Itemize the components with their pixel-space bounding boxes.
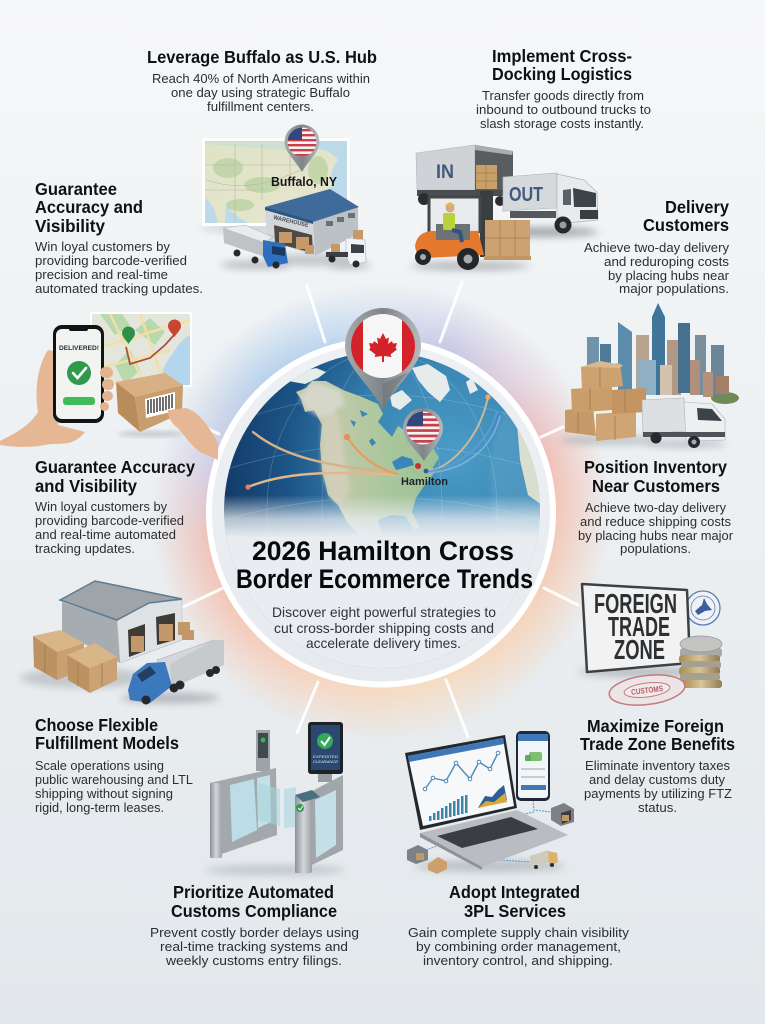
heading: Maximize Foreign xyxy=(587,716,724,736)
description: public warehousing and LTL xyxy=(35,772,193,787)
description: inbound to outbound trucks to xyxy=(476,102,651,117)
phone xyxy=(53,325,104,423)
heading: Prioritize Automated xyxy=(173,882,334,902)
icon: Canada flag pin xyxy=(345,308,421,410)
heading: Leverage Buffalo as U.S. Hub xyxy=(147,47,377,67)
circle base xyxy=(209,340,553,684)
heading: Visibility xyxy=(35,216,105,236)
heading: Choose Flexible xyxy=(35,715,158,735)
illustration: cross-dock trucks and forklift: OUT xyxy=(509,184,543,206)
cardboard boxes xyxy=(560,435,660,445)
description xyxy=(35,499,184,556)
description: and reduce shipping costs xyxy=(580,514,731,529)
heading: Guarantee Accuracy xyxy=(35,457,195,477)
phone xyxy=(516,731,550,801)
illustration: customs gates: CLEARANCE xyxy=(313,759,338,764)
coin stack xyxy=(679,636,722,688)
illustration: cross-dock trucks and forklift xyxy=(410,145,600,270)
description: rigid, long-term leases. xyxy=(35,800,164,815)
cardboard boxes xyxy=(33,630,117,693)
heading xyxy=(643,197,729,235)
description: Transfer goods directly from xyxy=(482,88,644,103)
small warehouse right xyxy=(551,803,574,826)
warehouse building xyxy=(62,602,120,663)
white delivery truck xyxy=(643,441,727,447)
description: Scale operations using xyxy=(35,758,164,773)
description xyxy=(584,240,730,296)
description xyxy=(476,88,651,131)
heading xyxy=(35,715,179,753)
description: providing barcode-verified xyxy=(35,253,187,268)
heading: Near Customers xyxy=(592,476,720,496)
description: automated tracking updates. xyxy=(35,281,203,296)
second hand xyxy=(168,408,218,460)
description: populations. xyxy=(620,541,691,556)
description: Eliminate inventory taxes xyxy=(585,758,730,773)
network lines xyxy=(420,800,551,862)
title xyxy=(236,536,533,594)
illustration: Buffalo map and warehouse: WAREHOUSE xyxy=(273,215,309,229)
description: Reach 40% of North Americans within xyxy=(152,71,370,86)
description: Win loyal customers by xyxy=(35,239,171,254)
description xyxy=(35,758,193,815)
area chart xyxy=(478,785,507,808)
description xyxy=(150,925,359,968)
grid xyxy=(224,358,540,525)
check screen xyxy=(318,770,332,782)
illustration: cross-dock trucks and forklift: IN xyxy=(436,162,454,183)
description: tracking updates. xyxy=(35,541,135,556)
bar chart xyxy=(429,795,468,821)
forklift driver xyxy=(446,204,454,212)
laptop screen xyxy=(405,735,517,830)
heading: Fulfillment Models xyxy=(35,733,179,753)
description: Win loyal customers by xyxy=(35,499,168,514)
label: Buffalo, NY: Buffalo, NY xyxy=(271,175,338,189)
illustration: FTZ sign, coins and stamps xyxy=(578,584,722,709)
panel: Guarantee Accuracy and Visibility (upper) xyxy=(0,179,218,460)
title: Border Ecommerce Trends xyxy=(236,564,533,594)
panel: Prioritize Automated Customs Compliance xyxy=(150,722,359,968)
description: fulfillment centers. xyxy=(207,99,314,114)
illustration: FTZ sign, coins and stamps: TRADE xyxy=(608,611,670,642)
central colour glow xyxy=(161,294,603,732)
heading xyxy=(35,457,195,496)
title description: accelerate delivery times. xyxy=(306,635,461,651)
heading xyxy=(492,46,632,84)
IN truck xyxy=(416,145,475,190)
description: Gain complete supply chain visibility xyxy=(408,925,630,940)
route arrows xyxy=(248,397,500,487)
panel: Adopt Integrated 3PL Services xyxy=(405,731,630,968)
description: Achieve two-day delivery xyxy=(585,500,727,515)
illustration: customs gates: EXPEDITED xyxy=(313,754,338,759)
description: by placing hubs near xyxy=(608,268,730,283)
fade to title area xyxy=(220,495,550,538)
heading: Customers xyxy=(643,215,729,235)
title description xyxy=(272,604,496,651)
laptop base xyxy=(420,810,568,867)
description: status. xyxy=(638,800,677,815)
lakes xyxy=(392,456,414,470)
arctic and greenland ice xyxy=(288,364,478,410)
heading: 3PL Services xyxy=(464,901,566,921)
left gate xyxy=(256,730,270,771)
small truck xyxy=(530,850,549,867)
heading: Accuracy and xyxy=(35,197,143,217)
fingers xyxy=(100,367,114,411)
description: and delay customs duty xyxy=(589,772,726,787)
sign xyxy=(582,584,690,672)
description xyxy=(35,239,203,296)
illustration: delivered phone, map and parcel xyxy=(0,312,218,460)
illustration: Buffalo map and warehouse xyxy=(200,124,372,269)
parcel xyxy=(428,857,447,874)
description xyxy=(408,925,630,968)
illustration: FTZ sign, coins and stamps: FOREIGN xyxy=(594,588,677,619)
heading: Position Inventory xyxy=(584,457,727,477)
description: real-time tracking systems and xyxy=(160,939,348,954)
holding hand xyxy=(0,350,85,447)
description: precision and real-time xyxy=(35,267,168,282)
glass barriers xyxy=(258,783,280,826)
panel: Leverage Buffalo as U.S. Hub xyxy=(147,47,377,269)
heading xyxy=(580,716,735,754)
OUT truck xyxy=(500,228,600,236)
title description: cut cross-border shipping costs and xyxy=(274,620,494,636)
connector spokes xyxy=(183,282,578,737)
description: major populations. xyxy=(619,281,729,296)
illustration: customs gates xyxy=(205,722,345,875)
parcel with barcode xyxy=(118,431,182,437)
panel: Maximize Foreign Trade Zone Benefits xyxy=(578,584,735,815)
illustration: city skyline, boxes and truck xyxy=(560,303,739,448)
globe map xyxy=(224,356,540,668)
panel: Implement Cross-Docking Logistics xyxy=(410,46,651,270)
description: and reduroping costs xyxy=(604,254,729,269)
description xyxy=(152,71,370,114)
red and blue location dots xyxy=(415,463,428,473)
description: Achieve two-day delivery xyxy=(584,240,730,255)
description: shipping without signing xyxy=(35,786,173,801)
illustration: FTZ sign, coins and stamps: ZONE xyxy=(614,634,665,665)
customs stamp: CUSTOMS xyxy=(631,684,664,697)
heading: Delivery xyxy=(665,197,729,217)
description: inventory control, and shipping. xyxy=(423,953,613,968)
illustration: delivered phone, map and parcel: DELIVERED! xyxy=(59,345,99,352)
pallet of boxes xyxy=(485,220,530,256)
right gate xyxy=(295,775,343,873)
description xyxy=(578,500,734,556)
heading: Docking Logistics xyxy=(492,64,632,84)
icon: US flag pin xyxy=(403,408,443,461)
description: one day using strategic Buffalo xyxy=(171,85,350,100)
pin xyxy=(284,124,320,172)
heading xyxy=(35,179,143,236)
north america landmass xyxy=(296,381,439,536)
heading xyxy=(449,882,580,921)
panel: Delivery Customers xyxy=(584,197,730,296)
description: by combining order management, xyxy=(416,939,621,954)
illustration: warehouse, boxes and blue truck xyxy=(20,581,224,704)
description: payments by utilizing FTZ xyxy=(584,786,732,801)
heading: Guarantee xyxy=(35,179,117,199)
heading: Trade Zone Benefits xyxy=(580,734,735,754)
heading xyxy=(171,882,337,921)
blue truck xyxy=(220,261,290,269)
description: Prevent costly border delays using xyxy=(150,925,359,940)
title description: Discover eight powerful strategies to xyxy=(272,604,496,620)
small warehouse left xyxy=(407,845,428,864)
warehouse xyxy=(265,254,365,266)
heading xyxy=(584,457,727,496)
panel: Guarantee Accuracy and Visibility (lower) xyxy=(35,457,195,556)
description: slash storage costs instantly. xyxy=(480,116,644,131)
panel: Position Inventory Near Customers xyxy=(560,303,739,556)
description: by placing hubs near major xyxy=(578,528,734,543)
forklift xyxy=(410,262,530,270)
description: weekly customs entry filings. xyxy=(165,953,342,968)
blue stamp xyxy=(686,591,720,625)
heading: and Visibility xyxy=(35,476,137,496)
heading: Adopt Integrated xyxy=(449,882,580,902)
label: Hamilton: Hamilton xyxy=(401,476,448,488)
description: providing barcode-verified xyxy=(35,513,184,528)
heading: Implement Cross- xyxy=(492,46,632,66)
central circle with globe and title xyxy=(209,308,570,684)
description xyxy=(584,758,732,815)
illustration: laptop dashboard, phone and network xyxy=(405,731,574,874)
white truck xyxy=(328,263,372,269)
blue truck xyxy=(120,693,220,703)
description: and real-time automated xyxy=(35,527,176,542)
heading: Customs Compliance xyxy=(171,901,337,921)
panel: Choose Flexible Fulfillment Models xyxy=(20,581,224,815)
title: 2026 Hamilton Cross xyxy=(252,536,514,566)
customs stamp xyxy=(608,671,686,709)
